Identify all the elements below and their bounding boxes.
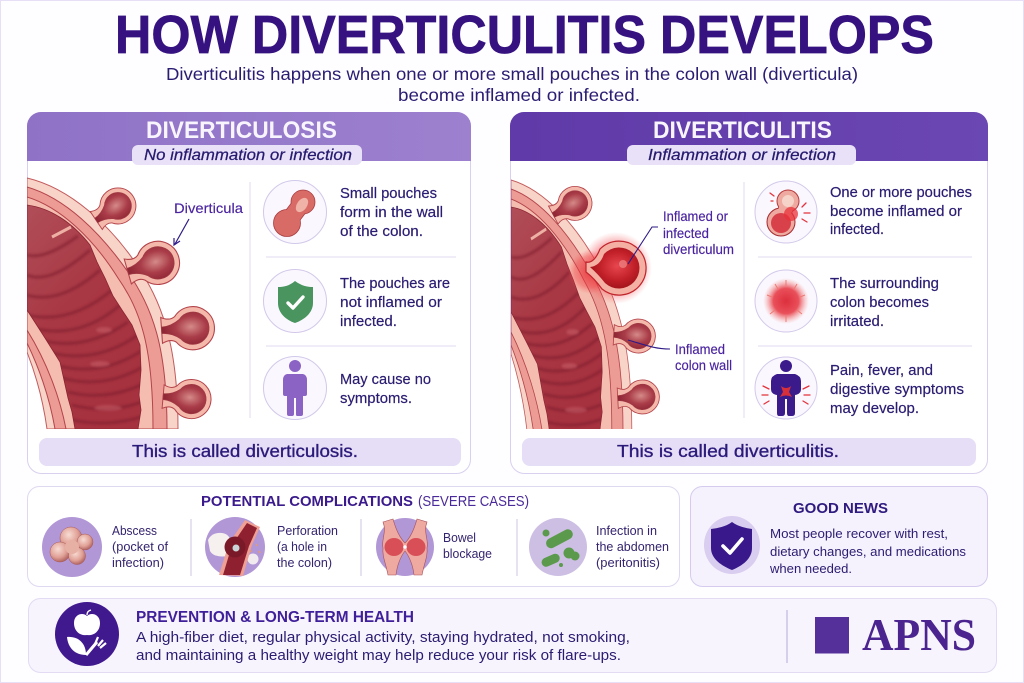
item: pouches inflamed: [755, 181, 972, 243]
complication: perforation: Perforation: [277, 524, 338, 538]
complication: perforation: (a hole in: [277, 540, 327, 554]
logo: APNS: APNS: [862, 609, 976, 660]
item: colon irritated: colon becomes: [830, 294, 929, 311]
caption: this is called diverticulitis: This is called diverticulitis.: [617, 441, 839, 461]
callout: inflamed diverticulum: infected: [663, 225, 709, 241]
complication: peritonitis: (peritonitis): [596, 556, 660, 570]
subtitle: Diverticulitis happens when one or more small pouches in the colon wall (diverticula): [166, 64, 858, 84]
item: pain and fever: may develop.: [830, 400, 919, 417]
callout: inflamed colon wall: [628, 340, 732, 373]
good news text: dietary changes, and medications: [770, 544, 966, 559]
callout: inflamed diverticulum: diverticulum: [663, 241, 734, 257]
item: small pouches: [264, 180, 443, 244]
item: no symptoms: symptoms.: [340, 390, 412, 407]
panel: prevention and long-term health: [28, 598, 996, 672]
prevention text: and maintaining a healthy weight may help reduce your risk of flare-ups.: [136, 648, 621, 664]
subtitle: become inflamed or infected.: [398, 85, 640, 105]
item: small pouches: form in the wall: [340, 204, 443, 221]
subheading pill: [627, 145, 856, 165]
illustration: healthy colon with diverticula: [27, 178, 216, 429]
complications heading: [201, 493, 529, 510]
panel: good news: [690, 486, 988, 586]
complication: abscess: [42, 517, 169, 577]
item: no symptoms: [264, 356, 431, 420]
item: pain and fever: [755, 357, 964, 419]
callout: inflamed diverticulum: Inflamed or: [663, 208, 728, 224]
item: pouches inflamed: One or more pouches: [830, 184, 972, 201]
panel: potential complications: [28, 486, 680, 586]
item: pouches inflamed: infected.: [830, 221, 884, 238]
header: diverticulosis: [27, 112, 471, 161]
item: no symptoms: May cause no: [340, 371, 431, 388]
icon: shield with check: [704, 516, 760, 574]
illustration: inflamed colon: [511, 180, 660, 431]
caption: this is called diverticulitis: [522, 438, 976, 466]
item: not inflamed: The pouches are: [340, 275, 450, 292]
subtitle: [166, 64, 858, 105]
complication: peritonitis: the abdomen: [596, 540, 669, 554]
complication: bowel blockage: blockage: [443, 547, 492, 561]
complication: perforation: the colon): [277, 556, 332, 570]
caption: this is called diverticulosis: This is called diverticulosis.: [132, 441, 358, 461]
complication: bowel blockage: [376, 518, 492, 576]
callout: diverticula: [174, 200, 243, 245]
complications heading: (SEVERE CASES): [418, 493, 529, 510]
callout: inflamed colon wall: colon wall: [675, 357, 732, 373]
item: pouches inflamed: become inflamed or: [830, 203, 962, 220]
callout: diverticula: Diverticula: [174, 200, 243, 216]
complication: perforation: [205, 517, 338, 577]
prevention text: [136, 630, 630, 664]
complication: bowel blockage: Bowel: [443, 531, 476, 545]
item: not inflamed: [264, 270, 450, 332]
complication: abscess: (pocket of: [112, 540, 169, 554]
complications heading: POTENTIAL COMPLICATIONS: [201, 493, 413, 510]
heading: diverticulitis: DIVERTICULITIS: [653, 117, 832, 144]
panel: diverticulosis: [27, 112, 471, 474]
item: small pouches: Small pouches: [340, 185, 437, 202]
good news text: when needed.: [769, 561, 852, 576]
caption: this is called diverticulosis: [39, 438, 461, 466]
logo: APNS: [815, 609, 976, 660]
item: colon irritated: [755, 270, 939, 332]
callout: inflamed diverticulum: [628, 208, 734, 264]
item: not inflamed: not inflamed or: [340, 294, 442, 311]
good news text: [769, 526, 966, 576]
header: diverticulitis: [510, 112, 988, 161]
panel: diverticulitis: [510, 112, 988, 474]
item: colon irritated: The surrounding: [830, 275, 939, 292]
subheading pill: No inflammation or infection: [144, 147, 352, 164]
complication: abscess: infection): [112, 556, 164, 570]
item: not inflamed: infected.: [340, 313, 397, 330]
callout: inflamed colon wall: Inflamed: [675, 341, 725, 357]
heading: diverticulosis: DIVERTICULOSIS: [146, 117, 337, 144]
item: small pouches: of the colon.: [340, 223, 423, 240]
item: pain and fever: digestive symptoms: [830, 381, 964, 398]
complication: abscess: Abscess: [112, 524, 157, 538]
title: HOW DIVERTICULITIS DEVELOPS: [115, 5, 934, 65]
icon: apple, leaf and fork: [55, 602, 119, 666]
subheading pill: Inflammation or infection: [648, 147, 836, 164]
complication: peritonitis: [529, 518, 669, 576]
complication: peritonitis: Infection in: [596, 524, 657, 538]
good news heading: GOOD NEWS: [793, 500, 888, 517]
item: pain and fever: Pain, fever, and: [830, 362, 933, 379]
good news text: Most people recover with rest,: [770, 526, 948, 541]
prevention text: A high-fiber diet, regular physical activity, staying hydrated, not smoking,: [136, 630, 630, 646]
item: colon irritated: irritated.: [830, 313, 884, 330]
prevention heading: PREVENTION & LONG-TERM HEALTH: [136, 609, 414, 626]
